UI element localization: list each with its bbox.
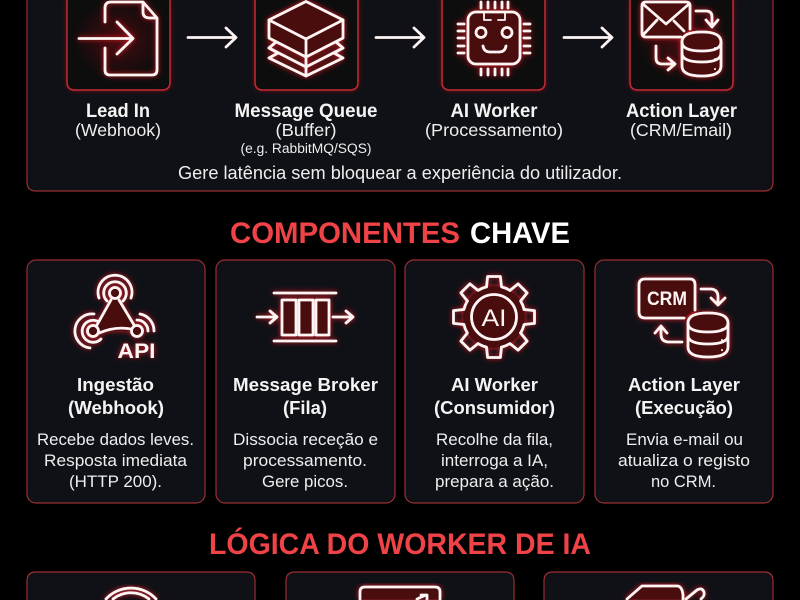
panel: ingestão: Resposta imediata — [44, 451, 188, 470]
panel: action layer: Action Layer — [628, 374, 740, 395]
arrow: queue to worker — [376, 28, 424, 47]
step: Action Layer — [626, 0, 738, 140]
panel: message broker: (Fila) — [283, 397, 327, 418]
panel: action layer: atualiza o registo — [618, 451, 750, 470]
panel: AI worker: (Consumidor) — [434, 397, 555, 418]
step: Lead In — [67, 0, 170, 140]
heading: componentes chave — [230, 217, 570, 250]
panel: action layer: no CRM. — [651, 472, 716, 491]
panel: AI worker: interroga a IA, — [441, 451, 548, 470]
icon: screen with arrow — [360, 587, 440, 599]
icon label: API: API — [118, 340, 156, 363]
step: AI Worker — [425, 0, 563, 140]
arrow: lead to queue — [188, 28, 236, 47]
step: Message Queue: (Buffer) — [276, 120, 336, 140]
step: Message Queue — [234, 0, 378, 156]
panel: ingestão: (Webhook) — [68, 397, 164, 418]
panel: message broker — [216, 260, 395, 503]
panel: message flow — [27, 0, 773, 191]
step: Action Layer: (CRM/Email) — [630, 120, 732, 140]
icon: smiling chip — [458, 2, 530, 75]
icon: queue — [257, 293, 353, 341]
heading: lógica do worker de IA: LÓGICA DO WORKER DE IA — [209, 527, 591, 561]
panel: logic card 1 — [27, 572, 255, 600]
heading: componentes chave: COMPONENTES — [230, 217, 460, 250]
panel: logic card 2 — [286, 572, 514, 600]
heading: componentes chave: CHAVE — [470, 217, 570, 250]
panel: ingestão — [27, 260, 205, 503]
panel: ingestão: (HTTP 200). — [69, 472, 162, 491]
step: Lead In: (Webhook) — [75, 120, 161, 140]
panel: AI worker: AI Worker — [451, 374, 538, 395]
panel: message broker: Message Broker — [233, 374, 378, 395]
panel: AI worker: prepara a ação. — [435, 472, 554, 491]
icon label: CRM: CRM — [647, 288, 687, 310]
icon: target — [106, 588, 156, 599]
icon: AI gear — [454, 276, 534, 358]
panel: message broker: processamento. — [243, 451, 367, 470]
panel: ingestão: Ingestão — [77, 374, 154, 395]
panel: action layer — [595, 260, 773, 503]
icon: document with arrow — [79, 2, 157, 75]
panel: AI worker: Recolhe da fila, — [436, 430, 553, 449]
panel: message broker: Gere picos. — [262, 472, 348, 491]
step: Action Layer: Action Layer — [626, 101, 738, 122]
step: Lead In: Lead In — [86, 101, 150, 122]
step: Message Queue: Message Queue — [234, 101, 378, 122]
arrow: worker to action — [564, 28, 612, 47]
icon: CRM and database — [639, 279, 728, 357]
panel: message broker: Dissocia receção e — [233, 430, 378, 449]
icon label: AI: AI — [482, 305, 506, 332]
panel: ingestão: Recebe dados leves. — [37, 430, 194, 449]
icon: box with pencil — [627, 586, 704, 599]
panel: action layer: Envia e-mail ou — [626, 430, 743, 449]
icon: webhook API — [75, 275, 154, 348]
step: AI Worker: AI Worker — [450, 101, 538, 122]
icon: envelope and database — [642, 2, 721, 76]
step: AI Worker: (Processamento) — [425, 120, 563, 140]
panel: logic card 3 — [544, 572, 773, 600]
caption: Gere latência sem bloquear a experiência do utilizador. — [178, 163, 622, 183]
panel: action layer: (Execução) — [635, 397, 733, 418]
icon: stacked layers — [269, 2, 343, 76]
step: Message Queue: (e.g. RabbitMQ/SQS) — [240, 141, 372, 156]
panel: AI worker — [405, 260, 584, 503]
